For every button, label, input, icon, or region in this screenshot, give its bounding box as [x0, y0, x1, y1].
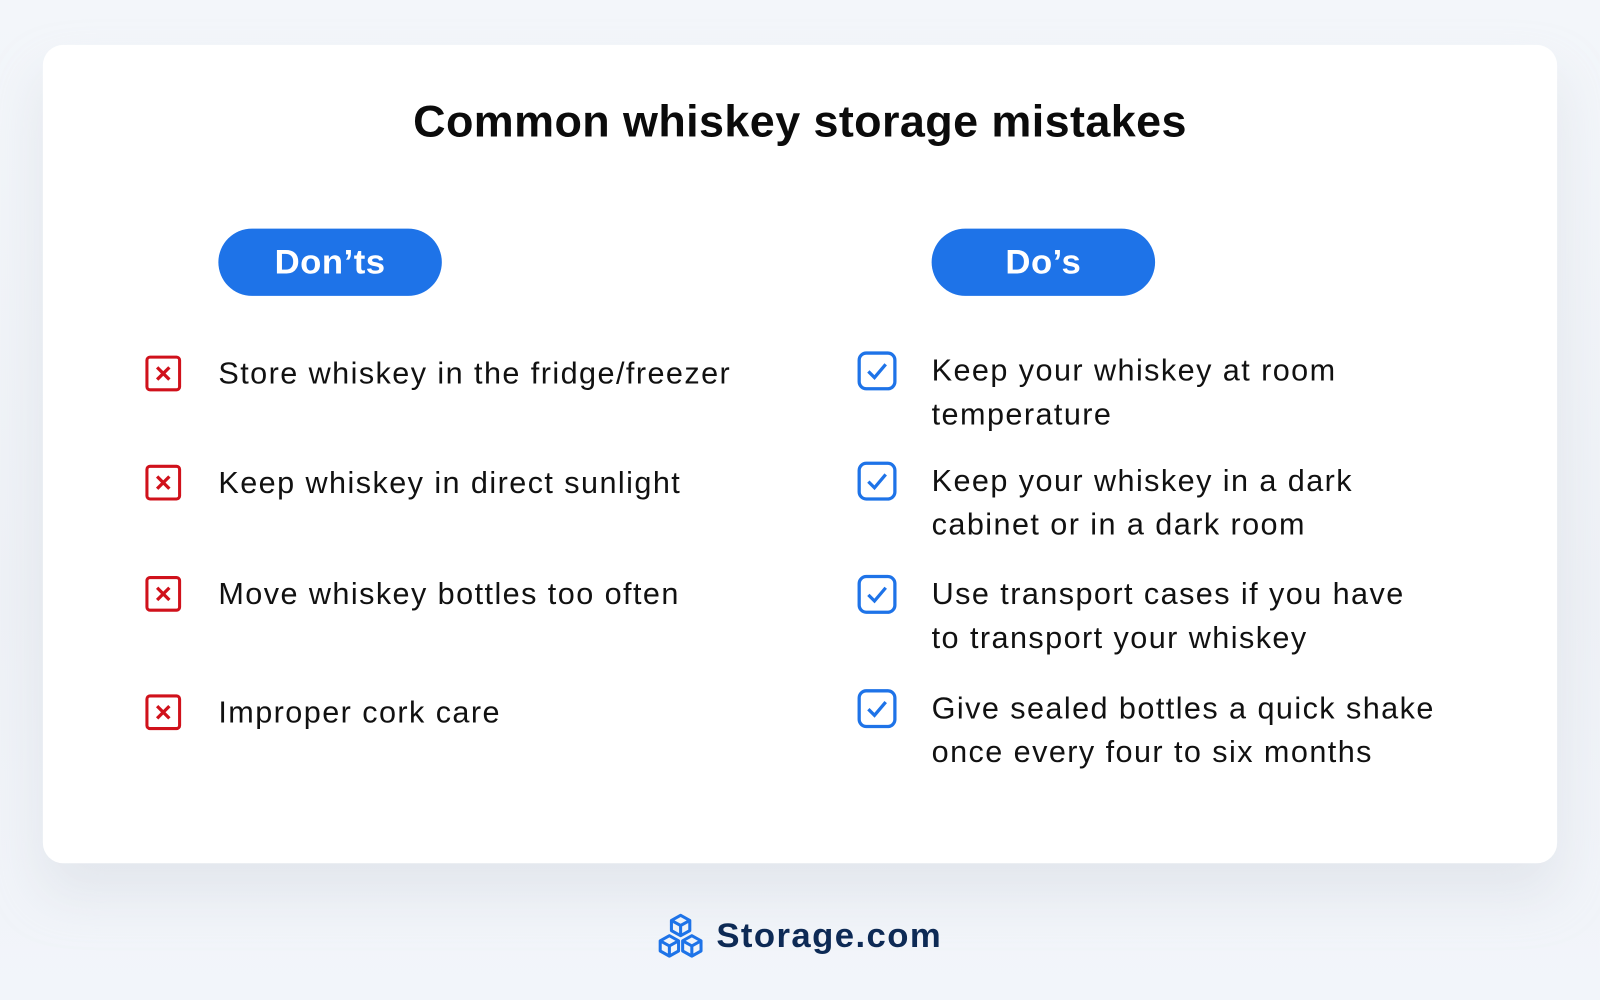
icon: check 3 — [858, 574, 896, 614]
text: do 4 — [932, 692, 1435, 769]
text: do 3: Use transport cases if you have — [932, 578, 1405, 611]
icon: check 2 — [858, 462, 896, 501]
text: brand: Storage.com — [716, 916, 942, 955]
icon: cubes — [658, 914, 703, 958]
text: don't 3: Move whiskey bottles too often — [218, 578, 680, 611]
card panel — [43, 45, 1557, 863]
text: do 1: temperature — [932, 398, 1112, 432]
logo — [658, 914, 942, 958]
pill: do's — [932, 229, 1155, 296]
icon: x 2 — [145, 464, 182, 500]
text: don't 4: Improper cork care — [218, 696, 501, 730]
icon: check 4 — [858, 689, 896, 728]
text: do 2 — [932, 464, 1353, 542]
title: Common whiskey storage mistakes — [413, 97, 1187, 147]
pill: don'ts — [218, 229, 442, 296]
text: don't 1: Store whiskey in the fridge/freezer — [218, 357, 731, 391]
text: do 4: Give sealed bottles a quick shake — [932, 692, 1435, 726]
text: do 2: Keep your whiskey in a dark — [932, 464, 1353, 498]
icon: check 1 — [858, 351, 896, 390]
pill: do's: Do’s — [1005, 243, 1081, 282]
text: do 3 — [932, 578, 1405, 655]
text: do 3: to transport your whiskey — [932, 621, 1308, 655]
icon: x 4 — [145, 694, 182, 730]
text: do 1 — [932, 354, 1337, 432]
text: don't 2: Keep whiskey in direct sunlight — [218, 466, 681, 500]
pill: don'ts: Don’ts — [275, 243, 386, 282]
text: do 2: cabinet or in a dark room — [932, 508, 1306, 542]
icon: x 1 — [145, 356, 182, 392]
text: do 4: once every four to six months — [932, 736, 1373, 769]
icon: x 3 — [145, 576, 182, 612]
text: do 1: Keep your whiskey at room — [932, 354, 1337, 388]
